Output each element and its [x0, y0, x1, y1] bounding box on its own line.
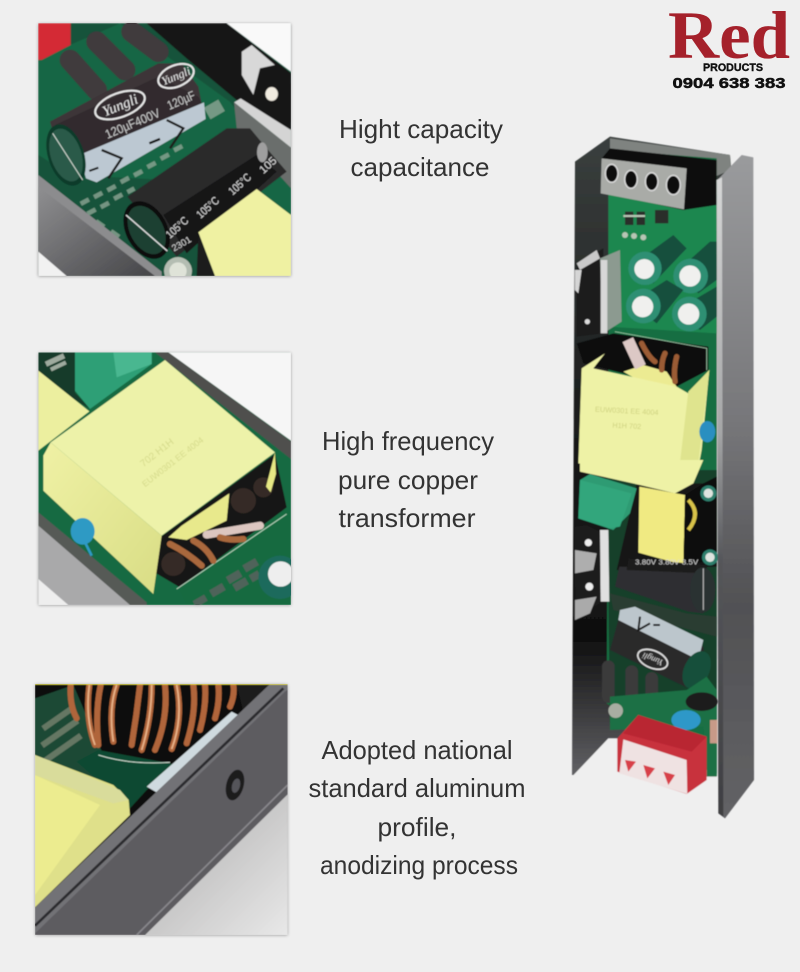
logo: PRODUCTS	[703, 62, 763, 74]
dark legs	[608, 667, 652, 708]
main transformer	[578, 353, 709, 477]
logo: 0904 638 383	[672, 75, 786, 92]
text: capacitance caption	[339, 114, 503, 182]
yellow top edge	[35, 683, 288, 685]
four capacitors	[626, 235, 717, 331]
text: capacitance caption: Hight capacity	[339, 114, 503, 144]
transformer marking: 702 H1H	[138, 437, 176, 470]
green PCB bottom	[610, 677, 717, 777]
screw	[608, 703, 623, 718]
aluminium side	[38, 512, 147, 605]
blue capacitor lower	[671, 710, 701, 730]
red connector	[38, 23, 71, 60]
text: aluminium caption: anodizing process	[320, 850, 518, 880]
SMD marks	[45, 353, 67, 371]
panel: transformer photo	[38, 352, 302, 607]
PCB lower	[607, 470, 717, 777]
PCB traces lower	[610, 593, 717, 637]
PCB lower right	[180, 509, 291, 605]
text: aluminium caption: standard aluminum	[308, 773, 526, 803]
aluminium side	[38, 175, 162, 276]
panel: capacitor photo	[38, 23, 291, 285]
green box capacitor	[75, 352, 152, 409]
text: transformer caption	[322, 426, 494, 533]
dark interior	[152, 454, 287, 587]
capacitor label Yungli: Yungli	[100, 92, 140, 120]
black wall	[147, 23, 291, 130]
capacitor label 105C: 105°C	[164, 215, 191, 241]
light floor	[145, 794, 288, 935]
text: aluminium caption: profile,	[378, 812, 456, 842]
right aluminium panel	[717, 155, 754, 818]
aluminium rail	[35, 684, 288, 935]
MOSFET and solder	[242, 45, 275, 95]
small transformer	[638, 487, 685, 565]
panel: transformer photo: EUW0301 EE 4004	[140, 435, 206, 489]
transformer windings	[623, 365, 677, 387]
aluminium face	[35, 690, 288, 935]
heatsink and MOSFET upper	[575, 248, 622, 337]
capacitor label value: 120µF400V	[103, 106, 163, 142]
panel: aluminium profile photo	[35, 683, 288, 935]
PCB right	[77, 750, 178, 808]
heatsink bar	[234, 98, 291, 148]
capacitor 1: 120µF	[165, 88, 198, 113]
capacitor 2	[114, 128, 287, 267]
left transformer	[38, 371, 89, 451]
component legs	[70, 32, 158, 90]
capacitor 2: 2301	[170, 234, 193, 253]
capacitor 2: 105°C	[195, 195, 222, 221]
lower dark PCB above transformer	[577, 333, 708, 387]
text: transformer caption: High frequency	[322, 426, 494, 456]
blue capacitor	[71, 518, 95, 545]
capacitor label second Yungli: Yungli	[159, 64, 193, 88]
transformer corner	[198, 189, 291, 276]
transformer marking: EUW0301 EE 4004	[595, 405, 659, 417]
floor in front of the terminal	[572, 738, 717, 823]
yellow transformer	[35, 755, 130, 907]
bobbin strip and wires	[168, 493, 229, 540]
text: transformer caption: transformer	[338, 503, 476, 533]
capacitor text: 3.80V 3.80V 3.5V	[635, 557, 698, 566]
transformer front	[43, 442, 162, 594]
PCB	[607, 150, 717, 777]
SMD traces	[80, 99, 225, 239]
copper toroid	[70, 685, 234, 750]
left wall	[572, 137, 732, 783]
text: capacitance caption: capacitance	[350, 152, 490, 182]
MOSFET lower	[575, 525, 600, 618]
green box	[578, 474, 637, 530]
capacitor label: Yungli	[640, 650, 665, 668]
product: power supply	[572, 137, 754, 823]
black capacitor	[615, 567, 715, 613]
lower part	[572, 460, 718, 823]
blue capacitor upper	[699, 421, 715, 442]
text: transformer caption: pure copper	[338, 465, 478, 495]
SMD parts	[625, 210, 668, 225]
screw	[163, 256, 193, 276]
capacitor 2: 105°C	[227, 172, 254, 198]
terminal block top	[601, 148, 717, 210]
screw	[225, 769, 245, 801]
capacitor 1	[39, 59, 206, 191]
PCB lighter area	[38, 23, 291, 215]
text: aluminium caption: Adopted national	[322, 735, 512, 765]
product: power supply: H1H 702	[612, 421, 641, 431]
red terminal	[617, 715, 707, 794]
capacitor 2: 105	[257, 155, 279, 177]
PCB left	[35, 686, 102, 778]
white bar	[147, 712, 239, 793]
transformer top	[51, 360, 275, 536]
yungli capacitor	[610, 620, 705, 688]
text: aluminium caption	[308, 735, 526, 880]
capacitor teal	[258, 556, 291, 600]
